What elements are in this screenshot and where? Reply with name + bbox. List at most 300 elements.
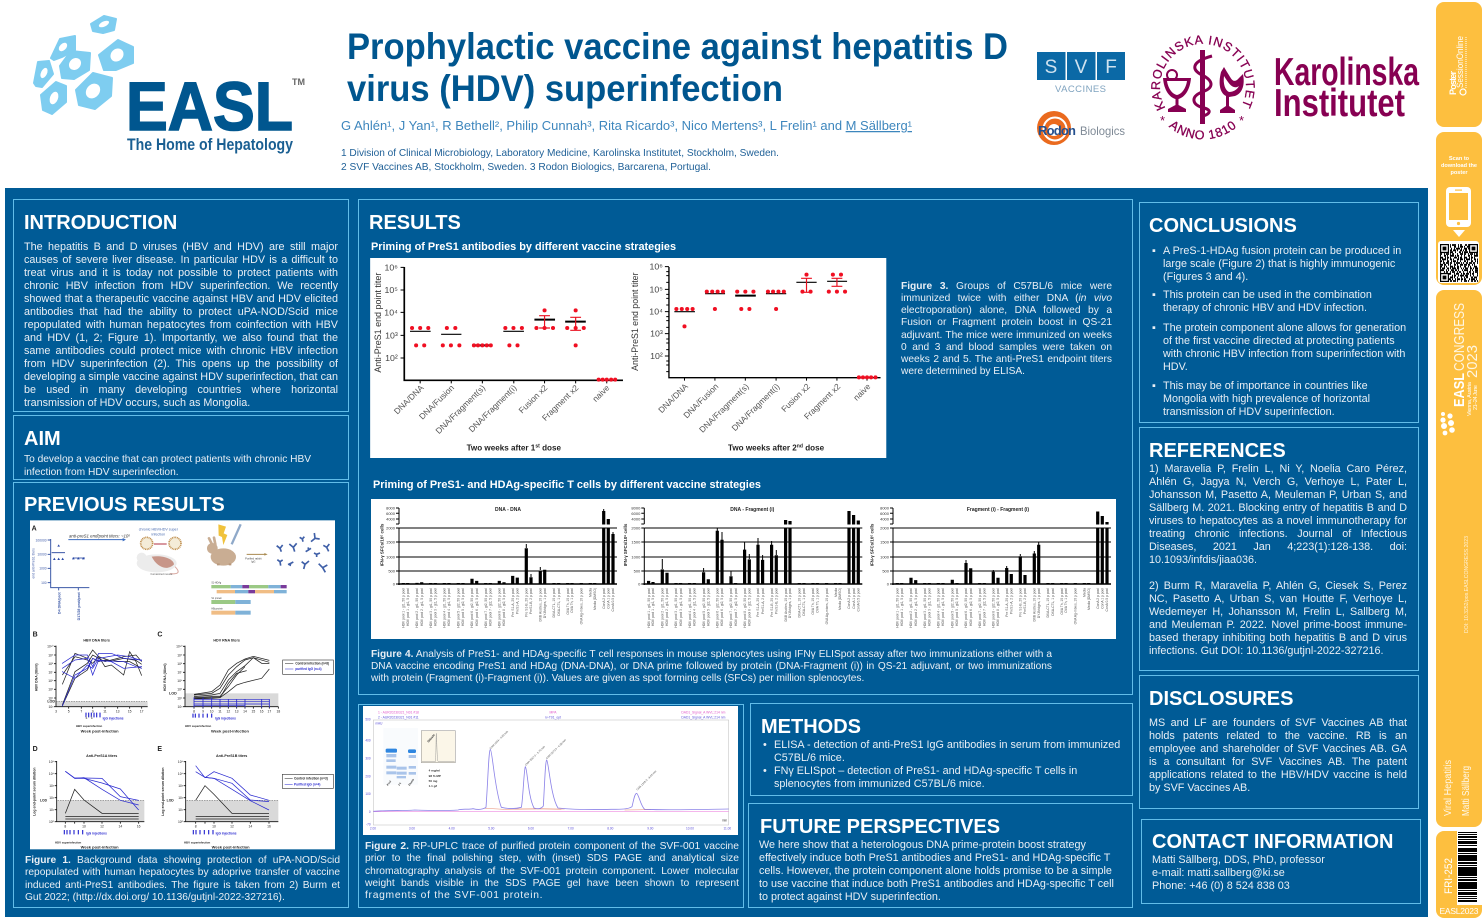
bar chart: Fragment (i) - Fragment (i): Fragment (i) - Fragment (i) [967, 507, 1029, 513]
bar chart: DNA - Fragment (i): 6000 [631, 511, 641, 516]
list: conclusions: of the first vaccine directed at protecting patients [1163, 335, 1395, 347]
bar chart: Fragment (i) - Fragment (i): DY-Bridges, 1 p pool [1037, 588, 1041, 618]
chart C: HDV RNA titers: 10¹⁰ [176, 645, 183, 649]
list: methods: ELISA - detection of anti-PreS1 IgG antibodies in serum from immunized [774, 739, 1120, 751]
chromatogram axes: min [722, 818, 727, 822]
sidebar panel: scan to download [1436, 132, 1482, 285]
sidebar panel: congress details: Vienna, Austria [1467, 381, 1473, 416]
peak annotations: CMA 1243.0 - 8.65 min [635, 769, 658, 791]
chromatogram axes: 100 [365, 792, 371, 796]
bar chart: Fragment (i) - Fragment (i): HDV pool 7 - gt2, 5 p pool [982, 588, 986, 626]
inset: sample specifications: 4 mg/ml [429, 769, 440, 773]
bar chart: DNA - Fragment (i): HDV pool 5 - gt2, 50 p pool [702, 588, 706, 628]
fusion protein constructs [211, 582, 287, 615]
sidebar panel: scan to download: poster [1450, 170, 1468, 176]
EASL logo [34, 16, 305, 154]
bar chart: DNA - Fragment (i): HDV pool 3 - gt1, 50 p pool [674, 588, 678, 628]
chromatogram axes: 200 [365, 774, 371, 778]
legend: chart D and E [282, 774, 333, 788]
bar chart: DNA - DNA: 2000 [386, 526, 396, 530]
inset: sample specifications: 98 % MP [429, 774, 441, 778]
SVF Vaccines logo: F [1105, 57, 1117, 78]
dot plot: two weeks after 2nd dose: Fusion x2 [779, 381, 812, 414]
bar chart: DNA - DNA: HDV pool 6 - gt2, 50 p pool [470, 588, 474, 628]
peak annotations [489, 729, 658, 791]
bar chart: DNA - DNA: HDV pool 5 - gt2, 5 p pool [461, 588, 465, 626]
chart C: HDV RNA titers: HDV RNA titers [213, 638, 240, 642]
text: disclosures: holds patents related to the vaccine. RB is an [1149, 730, 1407, 742]
bar chart: DNA - DNA: 8000 [386, 506, 396, 510]
chart E: anti-PreS1B titers: 10¹ [178, 808, 184, 812]
figure 3 caption: electroporation) alone, DNA followed by a [901, 305, 1112, 316]
text: references: Diseases, 2021 Jan 4;223(1):128-138. doi: [1149, 541, 1407, 553]
bar chart: Fragment (i) - Fragment (i): 8000 [880, 506, 890, 510]
chromatogram axes: 4.00 [449, 827, 455, 831]
list: conclusions: large scale (Figure 2) that is highly immunogenic [1163, 258, 1395, 270]
bar chart: Fragment (i) - Fragment (i): OVA Th, 1 p pool [1064, 588, 1068, 613]
chart B: HBV DNA titers: 10⁷ [48, 671, 54, 675]
bar chart: Fragment (i) - Fragment (i): HDV pool 2 - gt1, 5 p pool [914, 588, 918, 626]
text: references: Johansson M, Pasetto A, Meuleman P, Urban S, and [1149, 489, 1407, 501]
bar chart: DNA - DNA: OVA Th, 1 p pool [570, 588, 574, 613]
bar chart: DNA - Fragment (i): HDV pool 4 - gt1, 50 p pool [688, 588, 692, 628]
inset: SDS PAGE gel: Eluate [407, 777, 415, 787]
bar chart: Fragment (i) - Fragment (i): DXA-CTL, 10 p pool [1046, 588, 1050, 618]
chart C: HDV RNA titers: 10⁹ [177, 653, 183, 657]
chart E: anti-PreS1B titers: 10² [178, 796, 184, 800]
figure 3 caption: adjuvant. The mice were immunized on weeks [901, 330, 1112, 341]
chart D: anti-PreS1A titers: 14 [118, 825, 122, 829]
chart D: anti-PreS1A titers: Week post-infection [81, 844, 119, 849]
chart C: HDV RNA titers: LOD [169, 692, 177, 696]
chart C: HDV RNA titers: 10⁶ [177, 679, 183, 683]
bar chart: DNA - DNA: OVA Ag-mixes, 10 p pool [580, 588, 584, 624]
chart D: anti-PreS1A titers: Anti-PreS1A titers [86, 754, 117, 758]
title: Prophylactic vaccine against hepatitis D [347, 26, 1008, 67]
figure 2 caption: chromatography analysis of the SVF-001 protein component. Lower molecular [365, 866, 739, 877]
chromatogram axes: 500 [365, 718, 371, 722]
bar chart: DNA - DNA: OVA Th, 10 p pool [566, 588, 570, 615]
text: introduction: developing a simple vaccine against HDV superinfection, that can [24, 371, 338, 383]
dot plot: two weeks after 2nd dose: 10³ [650, 329, 663, 339]
dot plot: two weeks after 2nd dose: dose [803, 444, 825, 453]
list: conclusions: Mongolia with high prevalence of horizontal [1163, 393, 1370, 405]
bar chart: DNA - DNA: HDV pool 2 - gt1, 50 p pool [415, 588, 419, 628]
SVF Vaccines logo: VACCINES [1055, 84, 1106, 95]
panel: conclusions: ▪ [1152, 289, 1156, 301]
text: references: 1) Maravelia P, Frelin L, Ni Y, Noelia Caro Pérez, [1149, 463, 1407, 475]
bar chart: Fragment (i) - Fragment (i): PreS1-B, 2 p pool [1023, 588, 1027, 614]
bar chart: DNA - Fragment (i): 1000 [631, 554, 641, 560]
bar chart: Fragment (i) - Fragment (i): Media (DMSO) [1087, 588, 1091, 610]
sidebar panel: congress details: CONGRESS [1451, 303, 1468, 371]
Rodon Biologics logo [1037, 111, 1125, 145]
chart B: HBV DNA titers: 10¹⁰ [47, 645, 54, 649]
bar chart: DNA - DNA: DXA-CTL, 10 p pool [552, 588, 556, 618]
text: contact information: e-mail: matti.sallberg@ki.se [1152, 867, 1285, 879]
dot plot: two weeks after 1st dose: dose [540, 444, 562, 453]
figure 3 caption: Figure 3. Groups of C57BL/6 mice were [901, 281, 1112, 292]
chart E: anti-PreS1B titers: 14 [248, 825, 252, 829]
bar chart: DNA - DNA: DNA - DNA [495, 507, 521, 513]
dot plot: two weeks after 2nd dose: Fragment x2 [802, 381, 843, 421]
dot plot: two weeks after 1st dose: Anti-PreS1 end point titer [373, 273, 383, 373]
bar chart: DNA - Fragment (i): HDV pool 3 - gt1, 5 p pool [679, 588, 683, 626]
Karolinska Institutet seal: * [1160, 113, 1165, 128]
figure 1: background data panels A-E: D [33, 746, 38, 753]
dot plot: two weeks after 2nd dose: Anti-PreS1 end point titer [630, 272, 640, 371]
bar chart: Fragment (i) - Fragment (i): DXA-CTL, 1 p pool [1051, 588, 1055, 616]
subheading: PreS1 antibodies: Priming of PreS1 antibodies by different vaccine strategies [371, 241, 676, 253]
chart C: HDV RNA titers: 11 [218, 709, 222, 713]
chart D: anti-PreS1A titers: 10⁵ [49, 760, 55, 764]
chromatogram axes: 9.00 [647, 827, 654, 831]
sidebar panel: congress details: DOI: 10.3252/pos.EASLCONGRESS.2023 [1464, 536, 1470, 633]
figure 3 caption: were determined by ELISA. [901, 366, 1025, 377]
text: introduction: and HDV (1, 2; Figure 1). Importantly, we also found that the [24, 332, 338, 344]
bar chart: DNA - DNA: Media (DMSO) [593, 588, 597, 610]
chromatogram traces [373, 749, 729, 812]
figure 1: background data panels A-E: C [157, 631, 162, 638]
panel A: titer scatter: anti-preS1 end/point titers: ~10⁵ [69, 533, 130, 538]
text: references: NC, Pasetto A, Urban S, van Houtte F, Verhoye L, [1149, 593, 1407, 605]
peak annotations: CMA 1654 - 4.90 min [489, 729, 509, 750]
bar chart: Fragment (i) - Fragment (i): 500 [882, 568, 890, 574]
list: methods: FNγ ELISpot – detection of PreS1- and HDAg-specific T cells in [774, 765, 1077, 777]
legend: chart D and E: Purified IgG (n=4) [294, 782, 320, 786]
mouse and viruses schematic: humanized mouse [151, 572, 173, 576]
text: aim: To develop a vaccine that can protect patients with chronic HBV [24, 454, 311, 465]
dot plot: two weeks after 2nd dose: Two weeks after 2 [728, 444, 797, 453]
panel: future perspectives [748, 803, 1133, 908]
rabbit, adjuvant and antibodies schematic [207, 524, 329, 572]
chart D: anti-PreS1A titers: Log end-point serum dilution [32, 767, 36, 816]
panel: conclusions: ▪ [1152, 245, 1156, 257]
bar chart: Fragment (i) - Fragment (i): HDV pool 8 - gt2, 5 p pool [996, 588, 1000, 626]
dot plot: two weeks after 1st dose: 10⁵ [384, 285, 398, 295]
text: aim: infection from HDV superinfection. [24, 467, 179, 478]
chromatogram header labels: 1 - AUR20230321_N01 #18 [378, 711, 419, 715]
chart E: anti-PreS1B titers: 10⁴ [178, 772, 184, 776]
chart C: HDV RNA titers: Week post-infection [211, 728, 249, 733]
bar chart: Fragment (i) - Fragment (i): Pre S1-B, 20 p pool [1018, 588, 1022, 617]
bar chart: DNA - Fragment (i) [623, 506, 863, 628]
inset: sample specifications: 50 mg [429, 779, 438, 783]
bar chart: DNA - Fragment (i): ConA 0.5 p pool [856, 588, 860, 611]
heading: introduction: INTRODUCTION [24, 212, 177, 234]
figure 3 caption: weeks 2 and 5. The anti-PreS1 endpoint titers [901, 354, 1112, 365]
text: references: Sällberg M. 2021. Blocking entry of hepatitis B and D [1149, 502, 1407, 514]
text: introduction: antibodies that had the ability to protect uPA-NOD/Scid mice [24, 306, 338, 318]
bar chart: Fragment (i) - Fragment (i): OVA Ag-mixes, 10 p pool [1074, 588, 1078, 624]
bar chart: Fragment (i) - Fragment (i): 0 [887, 582, 890, 586]
chart D: anti-PreS1A titers: HDV superinfection [55, 840, 82, 844]
figure 1 caption: repopulated with human hepatocytes by adoprive transfer of vaccine [25, 867, 340, 878]
sidebar panel: poster session online: SessionOnline [1455, 36, 1465, 88]
bar chart: DNA - Fragment (i): HDV pool 4 - gt1, 5 p pool [692, 588, 696, 626]
heading: disclosures: DISCLOSURES [1149, 688, 1293, 710]
chromatogram axes: 2.00 [370, 827, 376, 831]
heading: conclusions: CONCLUSIONS [1149, 215, 1297, 237]
sidebar panel: congress details [1436, 290, 1482, 827]
panel A: titer scatter: end anti-PreS1 titers [31, 548, 35, 579]
sidebar panel: congress details: Matti Sällberg [1461, 766, 1472, 816]
inset: sample specifications [429, 769, 441, 788]
chart D: anti-PreS1A titers: 16 [137, 825, 141, 829]
figure 4: ELISpot bar charts [371, 499, 1116, 639]
mouse and viruses schematic: infection [152, 532, 165, 536]
bar chart: DNA - DNA: HDV pool 3 - gt1, 5 p pool [434, 588, 438, 626]
text: introduction [24, 241, 338, 409]
chromatogram axes: 6.00 [528, 827, 534, 831]
chart B: HBV DNA titers: HBV DNA (IU/ml) [34, 663, 38, 691]
header: logos, title and authors [33, 15, 1420, 173]
bar chart: Fragment (i) - Fragment (i): HDV pool 2 - gt1, 50 p pool [909, 588, 913, 628]
dot plot: two weeks after 2nd dose: nd [797, 444, 803, 450]
Karolinska Institutet seal: KAROLINSKA INSTITUTET [1151, 35, 1255, 111]
inset: size exclusion chromatogram: Diluate [426, 733, 436, 743]
mouse and viruses schematic: chronic HBV/HDV super [139, 528, 179, 532]
inset: size exclusion chromatogram [421, 731, 455, 763]
bar chart: DNA - DNA: 500 [388, 568, 396, 574]
chromatogram axes: 0 [369, 810, 371, 814]
bar chart: Fragment (i) - Fragment (i): 4000 [880, 516, 890, 522]
legend: chart B and C: Control infection (n=8) [295, 662, 329, 666]
text: future perspectives: We here show that a heterologous DNA prime-protein boost strategy [759, 839, 1086, 851]
bar chart: DNA - Fragment (i): DXA-CTL, 10 p pool [797, 588, 801, 618]
sidebar panel: congress details: EASL [1452, 373, 1468, 407]
bar chart: DNA - Fragment (i): OVA Ag-mixes, 10 p pool [825, 588, 829, 624]
chart B: HBV DNA titers: LOD [47, 700, 55, 704]
text: disclosures [1149, 717, 1407, 794]
panel: methods: • [763, 739, 767, 751]
chart C: HDV RNA titers: HDV superinfection [185, 724, 212, 728]
bar chart: Fragment (i) - Fragment (i): 1500 [880, 540, 890, 544]
Karolinska Institutet seal: ANNO 1810 [1168, 121, 1236, 140]
chart D: anti-PreS1A titers: 10² [49, 796, 55, 800]
bar chart: Fragment (i) - Fragment (i): HDV pool 5 - gt2, 5 p pool [955, 588, 959, 626]
bar chart: DNA - Fragment (i): HDV pool 6 - gt2, 5 p pool [720, 588, 724, 626]
bar chart: Fragment (i) - Fragment (i): Media [1082, 588, 1086, 597]
chart C: HDV RNA titers: 13 [235, 709, 239, 713]
bar chart: Fragment (i) - Fragment (i): OVA Th, 10 p pool [1060, 588, 1064, 615]
chart E: anti-PreS1B titers: HBV superinfection [184, 840, 211, 844]
chart D: anti-PreS1A titers: IgG injections [86, 832, 107, 836]
bar chart: DNA - DNA: 1500 [386, 540, 396, 544]
chart B: HBV DNA titers: 10⁶ [48, 679, 54, 683]
dot plot: two weeks after 2nd dose: 10² [650, 351, 663, 361]
dot plot: two weeks after 1st dose: Fusion x2 [516, 382, 550, 415]
bar chart: Fragment (i) - Fragment (i) [870, 506, 1112, 628]
bar chart: Fragment (i) - Fragment (i): HDV pool 6 - gt2, 50 p pool [964, 588, 968, 628]
text: disclosures: by SVF Vaccines AB. [1149, 782, 1250, 794]
SVF Vaccines logo [1037, 52, 1125, 95]
chromatogram axes: 10.00 [686, 827, 694, 831]
chromatogram header labels: DAD1_Signal_A WVL:214 nm [681, 715, 726, 719]
bar chart: Fragment (i) - Fragment (i): Pre S1-A, 20 p pool [1005, 588, 1009, 617]
bar chart: DNA - Fragment (i): ConA 2 p pool [847, 588, 851, 609]
text: introduction: same antibodies could protect mice with chronic HBV infection [24, 345, 338, 357]
bar chart: DNA - Fragment (i): Pre S1-B, 20 p pool [770, 588, 774, 617]
fusion protein constructs: HBcprotein [211, 608, 224, 611]
bar chart: Fragment (i) - Fragment (i): 2000 [880, 526, 890, 530]
bar chart: Fragment (i) - Fragment (i): 6000 [880, 511, 890, 516]
affiliations: 1 Division of Clinical Microbiology, Laboratory Medicine, Karolinska Institutet, Stockholm, Sweden. [341, 148, 779, 159]
text: introduction: causes of severe liver disease. In particular HDV is a difficult to [24, 254, 338, 266]
text: introduction: repopulated with human hepatocytes from coinfection with HBV [24, 319, 338, 331]
chart B: HBV DNA titers: 17 [140, 709, 144, 713]
panel: contact information [1141, 819, 1421, 904]
title: virus (HDV) superinfection [347, 68, 783, 109]
sidebar panel: scan to download: download the [1441, 163, 1477, 169]
chromatogram axes: 300 [365, 756, 371, 760]
peak annotations: CMA 0567.0 - 5.75 min [524, 744, 546, 767]
chart E: anti-PreS1B titers: 10³ [178, 784, 184, 788]
heading: contact information: CONTACT INFORMATION [1152, 831, 1393, 853]
rabbit, adjuvant and antibodies schematic: Purified rabbit [245, 556, 262, 560]
bar chart: DNA - DNA [380, 506, 618, 628]
bar chart: DNA - Fragment (i): OVA Th, 1 p pool [815, 588, 819, 613]
figure 1: background data panels A-E: E [157, 746, 162, 753]
bar chart: DNA - Fragment (i): DNA - Fragment (i) [730, 507, 775, 513]
inset: SDS PAGE gel: Pool [386, 779, 392, 787]
bar chart: DNA - Fragment (i): HDV pool 7 - gt2, 5 p pool [734, 588, 738, 626]
bar chart: DNA - Fragment (i): HDV pool 2 - gt1, 5 p pool [665, 588, 669, 626]
panel: aim [13, 415, 349, 480]
chart B: HBV DNA titers: 10⁵ [48, 688, 54, 692]
text: introduction: chronic HBV infection from HDV superinfection. We recently [24, 280, 338, 292]
list: conclusions: (Figures 3 and 4). [1163, 271, 1248, 283]
chart B: HBV DNA titers: 13 [116, 709, 120, 713]
bar chart: Fragment (i) - Fragment (i): HDV pool 3 - gt1, 50 p pool [923, 588, 927, 628]
bar chart: DNA - Fragment (i): HDV pool 7 - gt2, 50 p pool [729, 588, 733, 628]
panel: methods: • [763, 765, 767, 777]
chart E: anti-PreS1B titers [161, 754, 278, 849]
list: methods: splenocytes from immunized C57BL/6 mice. [774, 778, 985, 790]
chart B: HBV DNA titers: 10⁹ [48, 653, 54, 657]
panel A: titer scatter: 100000 [36, 538, 47, 542]
sidebar panel: poster session online: Poster [1448, 71, 1458, 95]
bar chart: Fragment (i) - Fragment (i): HDV pool 3 - gt1, 5 p pool [928, 588, 932, 626]
text: future perspectives: to use vaccine that induce both PreS1 antibodies and HDAg-specific T cell [759, 878, 1114, 890]
dot plot: two weeks after 2nd dose: 10⁶ [649, 262, 663, 272]
bar chart: DNA - DNA: IFN-γ SFCs/10⁶ cells [380, 523, 384, 566]
figure 3 caption: immunized twice with either DNA (in vivo [901, 293, 1112, 304]
list: methods: C57BL/6 mice. [774, 752, 845, 764]
chart C: HDV RNA titers [163, 638, 280, 733]
chart E: anti-PreS1B titers: 12 [230, 825, 234, 829]
dot plot: two weeks after 1st dose: DNA/Fusion [417, 382, 456, 421]
figure 1: background data panels A-E: A [32, 525, 37, 532]
panel: introduction [13, 199, 349, 412]
panel: disclosures [1139, 675, 1419, 809]
sidebar panel: congress details: Viral Hepatitis [1443, 760, 1454, 816]
figure 1: background data panels A-E [30, 520, 335, 850]
panel: results [358, 199, 1133, 695]
SVF Vaccines logo: S [1045, 57, 1057, 78]
dot plot: two weeks after 1st dose: naive [590, 382, 612, 404]
bar chart: Fragment (i) - Fragment (i): DXB Ascites, 10 p pool [1032, 588, 1036, 622]
chart C: HDV RNA titers: 10⁴ [177, 696, 183, 700]
panel A: titer scatter [31, 533, 130, 620]
chromatogram axes: 400 [365, 738, 371, 742]
dot plot: two weeks after 2nd dose: naive [851, 381, 873, 402]
chart B: HBV DNA titers: HBV superinfection [76, 724, 103, 728]
bar chart: Fragment (i) - Fragment (i): PreS1-A, 2 p pool [1010, 588, 1014, 614]
bar chart: DNA - Fragment (i): 0 [638, 582, 641, 586]
panel: previous results [13, 482, 349, 908]
dot plot: two weeks after 1st dose: Fragment x2 [540, 382, 581, 423]
chart C: HDV RNA titers: HDV RNA (IU/ml) [163, 663, 167, 691]
bar chart: DNA - Fragment (i): 4000 [631, 516, 641, 522]
chromatogram axes: 7.00 [568, 827, 574, 831]
chart D: anti-PreS1A titers: LOD [40, 799, 48, 803]
chart C: HDV RNA titers: IgG injections [215, 717, 236, 721]
text: references: based therapy inhibiting both hepatitis B and D virus [1149, 632, 1407, 644]
list: methods [763, 739, 1120, 790]
text: future perspectives [759, 839, 1114, 903]
bar chart: DNA - DNA: HDV pool 7 - gt2, 5 p pool [488, 588, 492, 626]
bar chart: DNA - Fragment (i): ConA 1 p pool [852, 588, 856, 609]
chart B: HBV DNA titers: 10⁴ [48, 696, 54, 700]
text: references: Wedemeyer H, Johansson M, Frelin L, Sallberg M, [1149, 606, 1407, 618]
text: future perspectives: effectively induce both PreS1 antibodies and PreS1- and HDAg-specific T [759, 852, 1110, 864]
bar chart: DNA - DNA: HDV pool 2 - gt1, 5 p pool [420, 588, 424, 626]
figure 1 caption [25, 855, 340, 903]
sidebar panel: abstract number and barcode: FRI-252 [1443, 858, 1455, 894]
figure 3 caption: Fusion or Fragment protein boost in QS-21 [901, 317, 1112, 328]
panel: conclusions [1139, 202, 1419, 423]
chart B: HBV DNA titers: 7 [80, 709, 82, 713]
sidebar panel: scan to download: Scan to [1449, 156, 1470, 162]
Karolinska Institutet seal: * [1239, 113, 1244, 128]
bar chart: Fragment (i) - Fragment (i): HDV pool 1 - gt1, 5 p pool [900, 588, 904, 626]
chart C: HDV RNA titers: 15 [251, 709, 255, 713]
bar chart: DNA - DNA: DXA-CTL, 1 p pool [557, 588, 561, 616]
inset: SDS PAGE gel [383, 728, 418, 787]
bar chart: DNA - DNA: ConA 0.5 p pool [611, 588, 615, 611]
chart D: anti-PreS1A titers: 10¹ [49, 808, 55, 812]
chart B: HBV DNA titers [34, 638, 148, 733]
sidebar: orange poster information strip [1436, 2, 1482, 918]
QR code [1438, 241, 1479, 283]
sidebar panel: poster session online [1436, 2, 1482, 127]
dot plot: two weeks after 1st dose: DNA/Fragment(i) [466, 383, 519, 434]
bar chart: DNA - DNA: PreS1-A, 2 p pool [516, 588, 520, 614]
bar chart: DNA - Fragment (i): HDV pool 6 - gt2, 50 p pool [715, 588, 719, 628]
text: introduction: The hepatitis B and D viruses (HBV and HDV) are still major [24, 241, 338, 253]
chart C: HDV RNA titers: 8 [193, 709, 195, 713]
figure 2 caption: fragments of the SVF-001 protein. [365, 890, 543, 901]
figure 4 caption: with protein (Fragment (i)-Fragment (i)). Values are given as spot forming cells (SFCs) per million splenocytes. [371, 673, 864, 684]
chart B: HBV DNA titers: Week post-infection [81, 728, 119, 733]
panel A: titer scatter: 100 [41, 581, 47, 585]
list: conclusions: transmission of HDV superinfection. [1163, 406, 1335, 418]
bar chart: DNA - Fragment (i): Pre S1-A, 20 p pool [756, 588, 760, 617]
legend: chart B and C: purified IgG (n=4) [295, 667, 322, 671]
text: references: viruses to hepatocytes as a novel immunotherapy for [1149, 515, 1407, 527]
dot plot: two weeks after 2nd dose: DNA/DNA [656, 381, 690, 415]
heading: results: RESULTS [369, 212, 461, 234]
bar chart: DNA - DNA: ConA 1 p pool [606, 588, 610, 609]
text: references: and Meuleman P. 2022. Novel prime-boost immune- [1149, 619, 1407, 631]
main blue background [5, 188, 1428, 917]
subheading: T cells: Priming of PreS1- and HDAg-specific T cells by different vaccine strategies [373, 479, 761, 491]
text: disclosures: applications related to the HBV/HDV vaccine is held [1149, 769, 1407, 781]
sidebar panel: abstract number and barcode: EASL2023 [1440, 906, 1479, 916]
chart D: anti-PreS1A titers: 10³ [49, 784, 55, 788]
bar chart: DNA - Fragment (i): DXB Ascites, 10 p pool [784, 588, 788, 622]
